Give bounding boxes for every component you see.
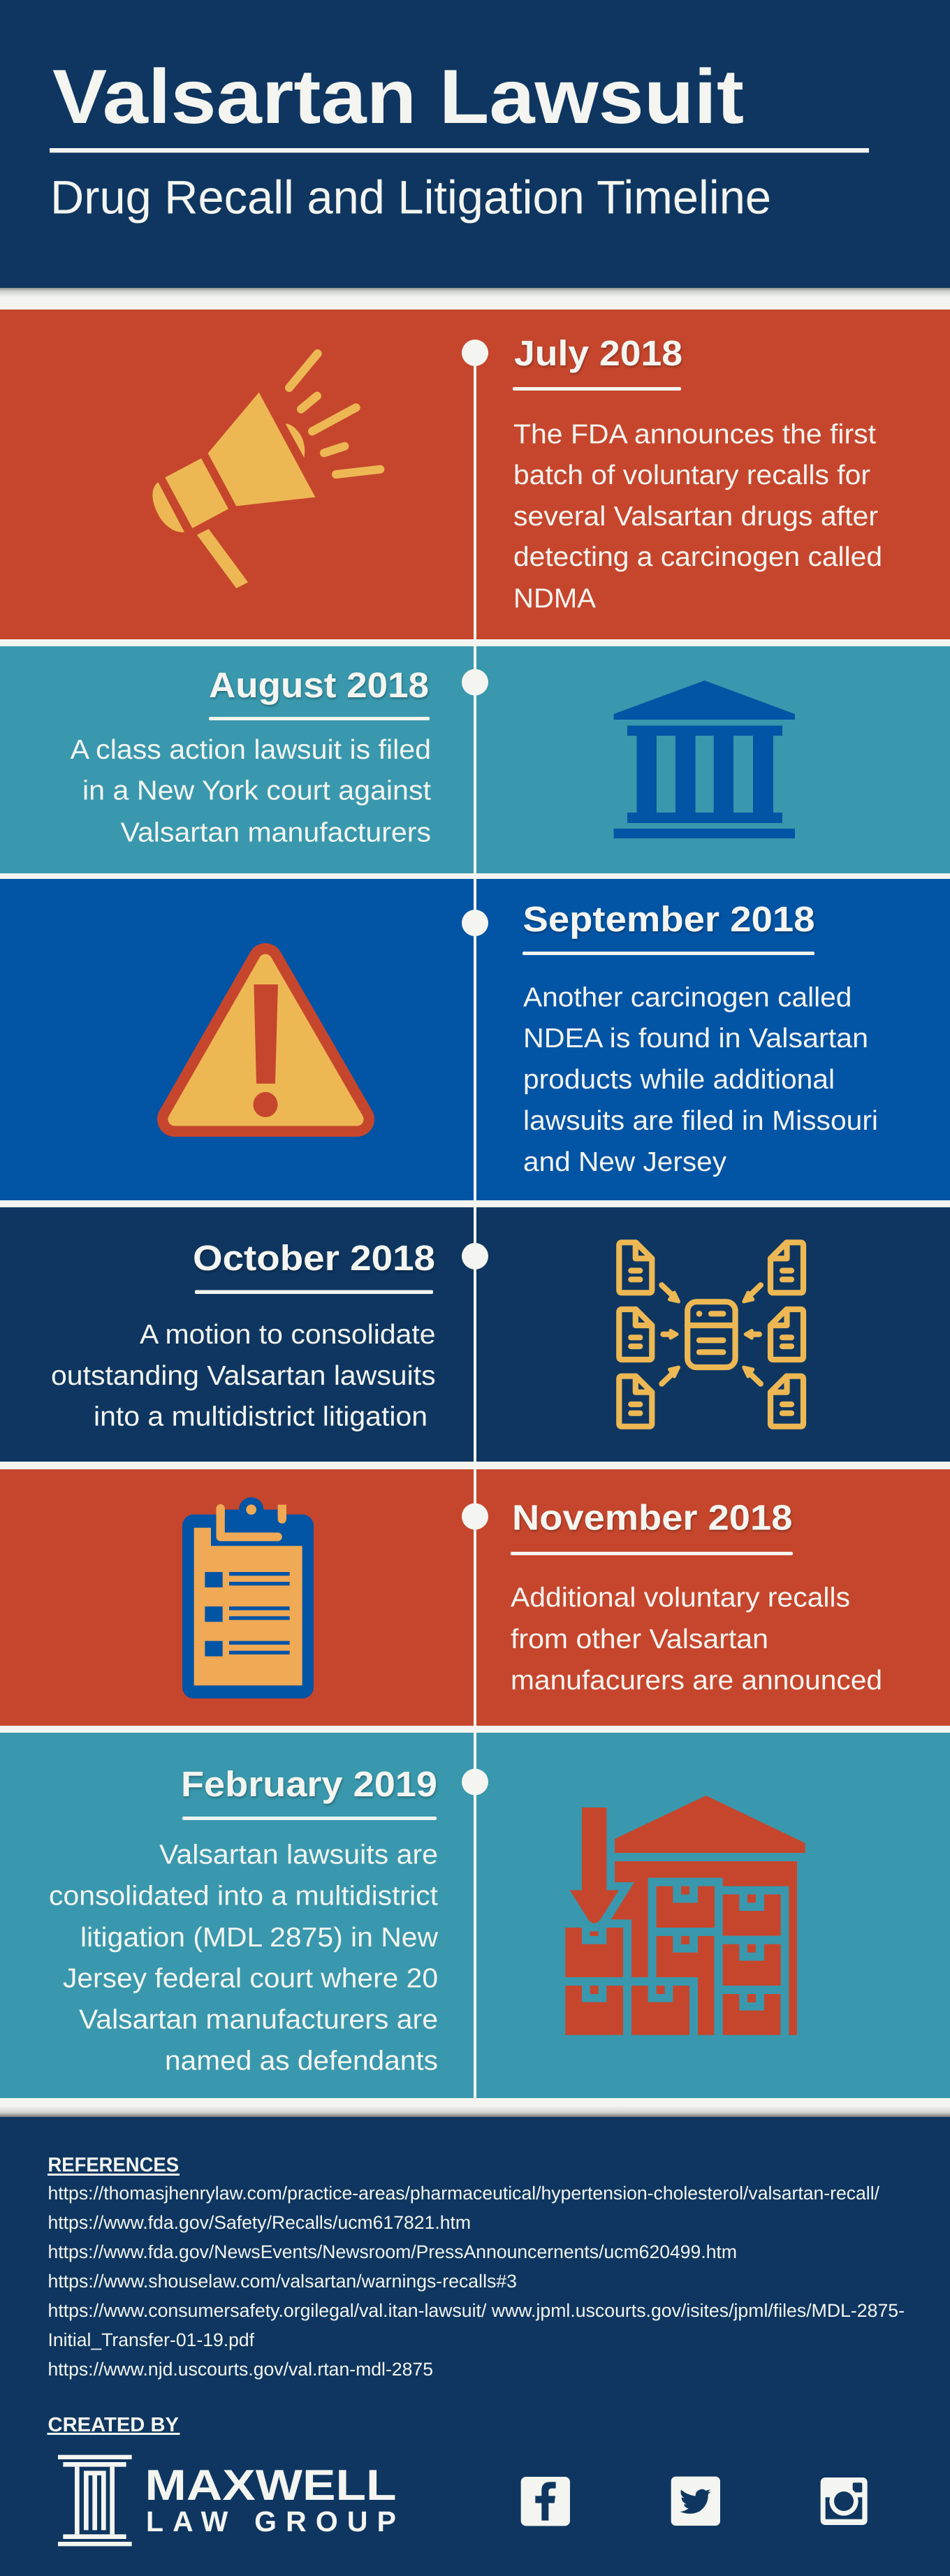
subtitle: Drug Recall and Litigation Timeline bbox=[50, 172, 771, 224]
references list bbox=[48, 2183, 905, 2380]
icon: megaphone bbox=[152, 354, 380, 588]
body text bbox=[49, 1839, 439, 2076]
date heading: November 2018 bbox=[512, 1498, 792, 1537]
body text: Valsartan lawsuits are bbox=[159, 1839, 438, 1870]
body text: Jersey federal court where 20 bbox=[63, 1963, 438, 1994]
logo wordmark: MAXWELL bbox=[145, 2461, 397, 2510]
header panel bbox=[0, 0, 950, 298]
body text: detecting a carcinogen called bbox=[513, 541, 882, 572]
body text: named as defendants bbox=[165, 2046, 438, 2076]
body text bbox=[71, 734, 431, 848]
icon: clipboard checklist bbox=[182, 1497, 314, 1698]
references list: https://www.fda.gov/NewsEvents/Newsroom/PressAnnouncernents/ucm620499.htm bbox=[48, 2241, 737, 2262]
date heading: October 2018 bbox=[193, 1238, 435, 1278]
body text: lawsuits are filed in Missouri bbox=[523, 1105, 878, 1136]
body text: NDMA bbox=[513, 583, 597, 613]
date heading: September 2018 bbox=[522, 899, 814, 939]
icon: warning triangle bbox=[175, 961, 357, 1119]
footer panel bbox=[0, 2106, 950, 2576]
icon: courthouse bbox=[614, 681, 795, 838]
body text: The FDA announces the first bbox=[513, 419, 876, 450]
references heading: REFERENCES bbox=[48, 2154, 179, 2176]
panel: July 2018 bbox=[0, 310, 950, 639]
body text: in a New York court against bbox=[82, 776, 431, 806]
icon: documents consolidating bbox=[619, 1242, 803, 1427]
references list: https://thomasjhenrylaw.com/practice-areas/pharmaceutical/hypertension-cholesterol/valsartan-recall/ bbox=[48, 2183, 880, 2204]
created by heading: CREATED BY bbox=[48, 2414, 179, 2436]
date heading: February 2019 bbox=[181, 1764, 437, 1804]
panel: September 2018 bbox=[0, 879, 950, 1200]
body text bbox=[511, 1582, 882, 1696]
logo tagline: LAW GROUP bbox=[146, 2505, 396, 2538]
panel: February 2019 bbox=[0, 1733, 950, 2098]
references list: https://www.shouselaw.com/valsartan/warnings-recalls#3 bbox=[48, 2271, 517, 2292]
body text: products while additional bbox=[523, 1064, 835, 1095]
body text: Valsartan manufacturers bbox=[121, 817, 431, 848]
body text: Another carcinogen called bbox=[523, 982, 852, 1013]
date heading: July 2018 bbox=[514, 333, 682, 373]
body text: outstanding Valsartan lawsuits bbox=[51, 1360, 436, 1391]
body text: consolidated into a multidistrict bbox=[49, 1881, 438, 1912]
logo: Maxwell Law Group bbox=[58, 2455, 396, 2546]
title: Valsartan Lawsuit bbox=[52, 54, 744, 140]
body text: from other Valsartan bbox=[511, 1624, 768, 1654]
body text: NDEA is found in Valsartan bbox=[523, 1023, 868, 1054]
body text: and New Jersey bbox=[523, 1147, 726, 1177]
icon: instagram bbox=[821, 2477, 868, 2525]
references list: Initial_Transfer-01-19.pdf bbox=[48, 2329, 255, 2350]
body text: litigation (MDL 2875) in New bbox=[80, 1922, 439, 1953]
body text bbox=[513, 419, 882, 613]
panel: October 2018 bbox=[0, 1207, 950, 1462]
body text: into a multidistrict litigation bbox=[94, 1402, 428, 1432]
body text: A class action lawsuit is filed bbox=[71, 734, 431, 765]
body text: Valsartan manufacturers are bbox=[79, 2004, 438, 2035]
body text bbox=[51, 1319, 436, 1432]
timeline spine bbox=[462, 340, 488, 2098]
body text: A motion to consolidate bbox=[140, 1319, 436, 1350]
references list: https://www.consumersafety.orgilegal/val.itan-lawsuit/ www.jpml.uscourts.gov/isites/jpml/files/MDL-2875- bbox=[48, 2300, 905, 2321]
icon: facebook bbox=[521, 2477, 570, 2526]
panel: November 2018 bbox=[0, 1469, 950, 1726]
date heading: August 2018 bbox=[209, 665, 429, 705]
body text: manufacurers are announced bbox=[511, 1665, 882, 1696]
panel: August 2018 bbox=[0, 646, 950, 873]
body text bbox=[523, 982, 878, 1177]
body text: Additional voluntary recalls bbox=[511, 1582, 850, 1613]
body text: several Valsartan drugs after bbox=[513, 501, 878, 532]
icon: warehouse with boxes bbox=[565, 1796, 805, 2035]
body text: batch of voluntary recalls for bbox=[513, 460, 870, 490]
references list: https://www.njd.uscourts.gov/val.rtan-mdl-2875 bbox=[48, 2359, 433, 2380]
icon: twitter bbox=[671, 2477, 720, 2526]
icon: pillar bbox=[58, 2455, 132, 2546]
references list: https://www.fda.gov/Safety/Recalls/ucm617821.htm bbox=[48, 2212, 471, 2233]
